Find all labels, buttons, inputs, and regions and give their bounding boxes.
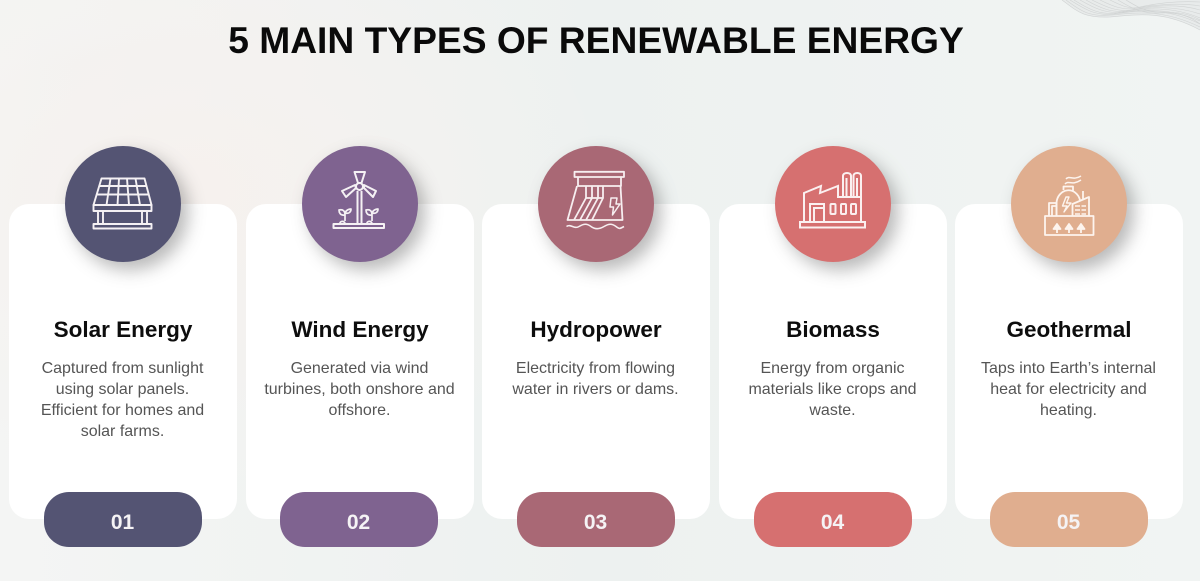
circle: wind (302, 146, 418, 262)
icon: wind turbine (332, 171, 385, 229)
panel: geothermal (955, 204, 1183, 519)
circle: biomass (775, 146, 891, 262)
badge: 05 (990, 492, 1148, 547)
text: hydropower description: water in rivers or dams. (512, 381, 679, 398)
panel: hydropower (482, 204, 710, 519)
text: biomass description: Energy from organic (760, 360, 905, 377)
text: biomass description (748, 360, 917, 419)
text: wind energy description: Generated via wind (291, 360, 428, 377)
text: solar energy description: Efficient for homes and (41, 402, 204, 419)
text: hydropower description (512, 360, 679, 398)
badge: 03: 03 (584, 511, 607, 534)
text: wind energy description: turbines, both onshore and (264, 381, 455, 398)
panel: wind energy (246, 204, 474, 519)
text: solar energy description (41, 360, 204, 440)
circle: solar (65, 146, 181, 262)
text: wind energy description: offshore. (329, 402, 390, 419)
text: hydropower description: Electricity from flowing (516, 360, 675, 377)
heading: solar energy: Solar Energy (54, 316, 192, 342)
text: geothermal description: heat for electricity and (990, 381, 1147, 398)
text: geothermal description: Taps into Earth’s internal (981, 360, 1156, 377)
circle: geothermal (1011, 146, 1127, 262)
icon: geothermal plant (1044, 176, 1094, 236)
panel: solar energy (9, 204, 237, 519)
badge: 01 (44, 492, 202, 547)
text: wind energy description (264, 360, 455, 419)
heading: biomass: Biomass (786, 316, 880, 342)
text: solar energy description: Captured from sunlight (42, 360, 203, 377)
panel: biomass (719, 204, 947, 519)
title: 5 MAIN TYPES OF RENEWABLE ENERGY (228, 19, 964, 61)
heading: wind energy: Wind Energy (291, 316, 429, 342)
text: biomass description: waste. (809, 402, 856, 419)
text: solar energy description: solar farms. (81, 423, 164, 440)
decorative wave: top right (1062, 0, 1200, 30)
badge: 01: 01 (111, 511, 134, 534)
text: solar energy description: using solar panels. (56, 381, 189, 398)
text: biomass description: materials like crops and (748, 381, 917, 398)
text: geothermal description (981, 360, 1156, 419)
heading: geothermal: Geothermal (1006, 316, 1132, 342)
badge: 02: 02 (347, 511, 370, 534)
icon: solar panel (92, 178, 152, 230)
badge: 03 (517, 492, 675, 547)
badge: 04: 04 (821, 511, 844, 534)
badge: 02 (280, 492, 438, 547)
badge: 05: 05 (1057, 511, 1080, 534)
icon: hydroelectric dam (566, 170, 625, 230)
text: geothermal description: heating. (1040, 402, 1097, 419)
circle: hydropower (538, 146, 654, 262)
icon: factory (799, 172, 866, 228)
badge: 04 (754, 492, 912, 547)
heading: hydropower: Hydropower (530, 316, 662, 342)
